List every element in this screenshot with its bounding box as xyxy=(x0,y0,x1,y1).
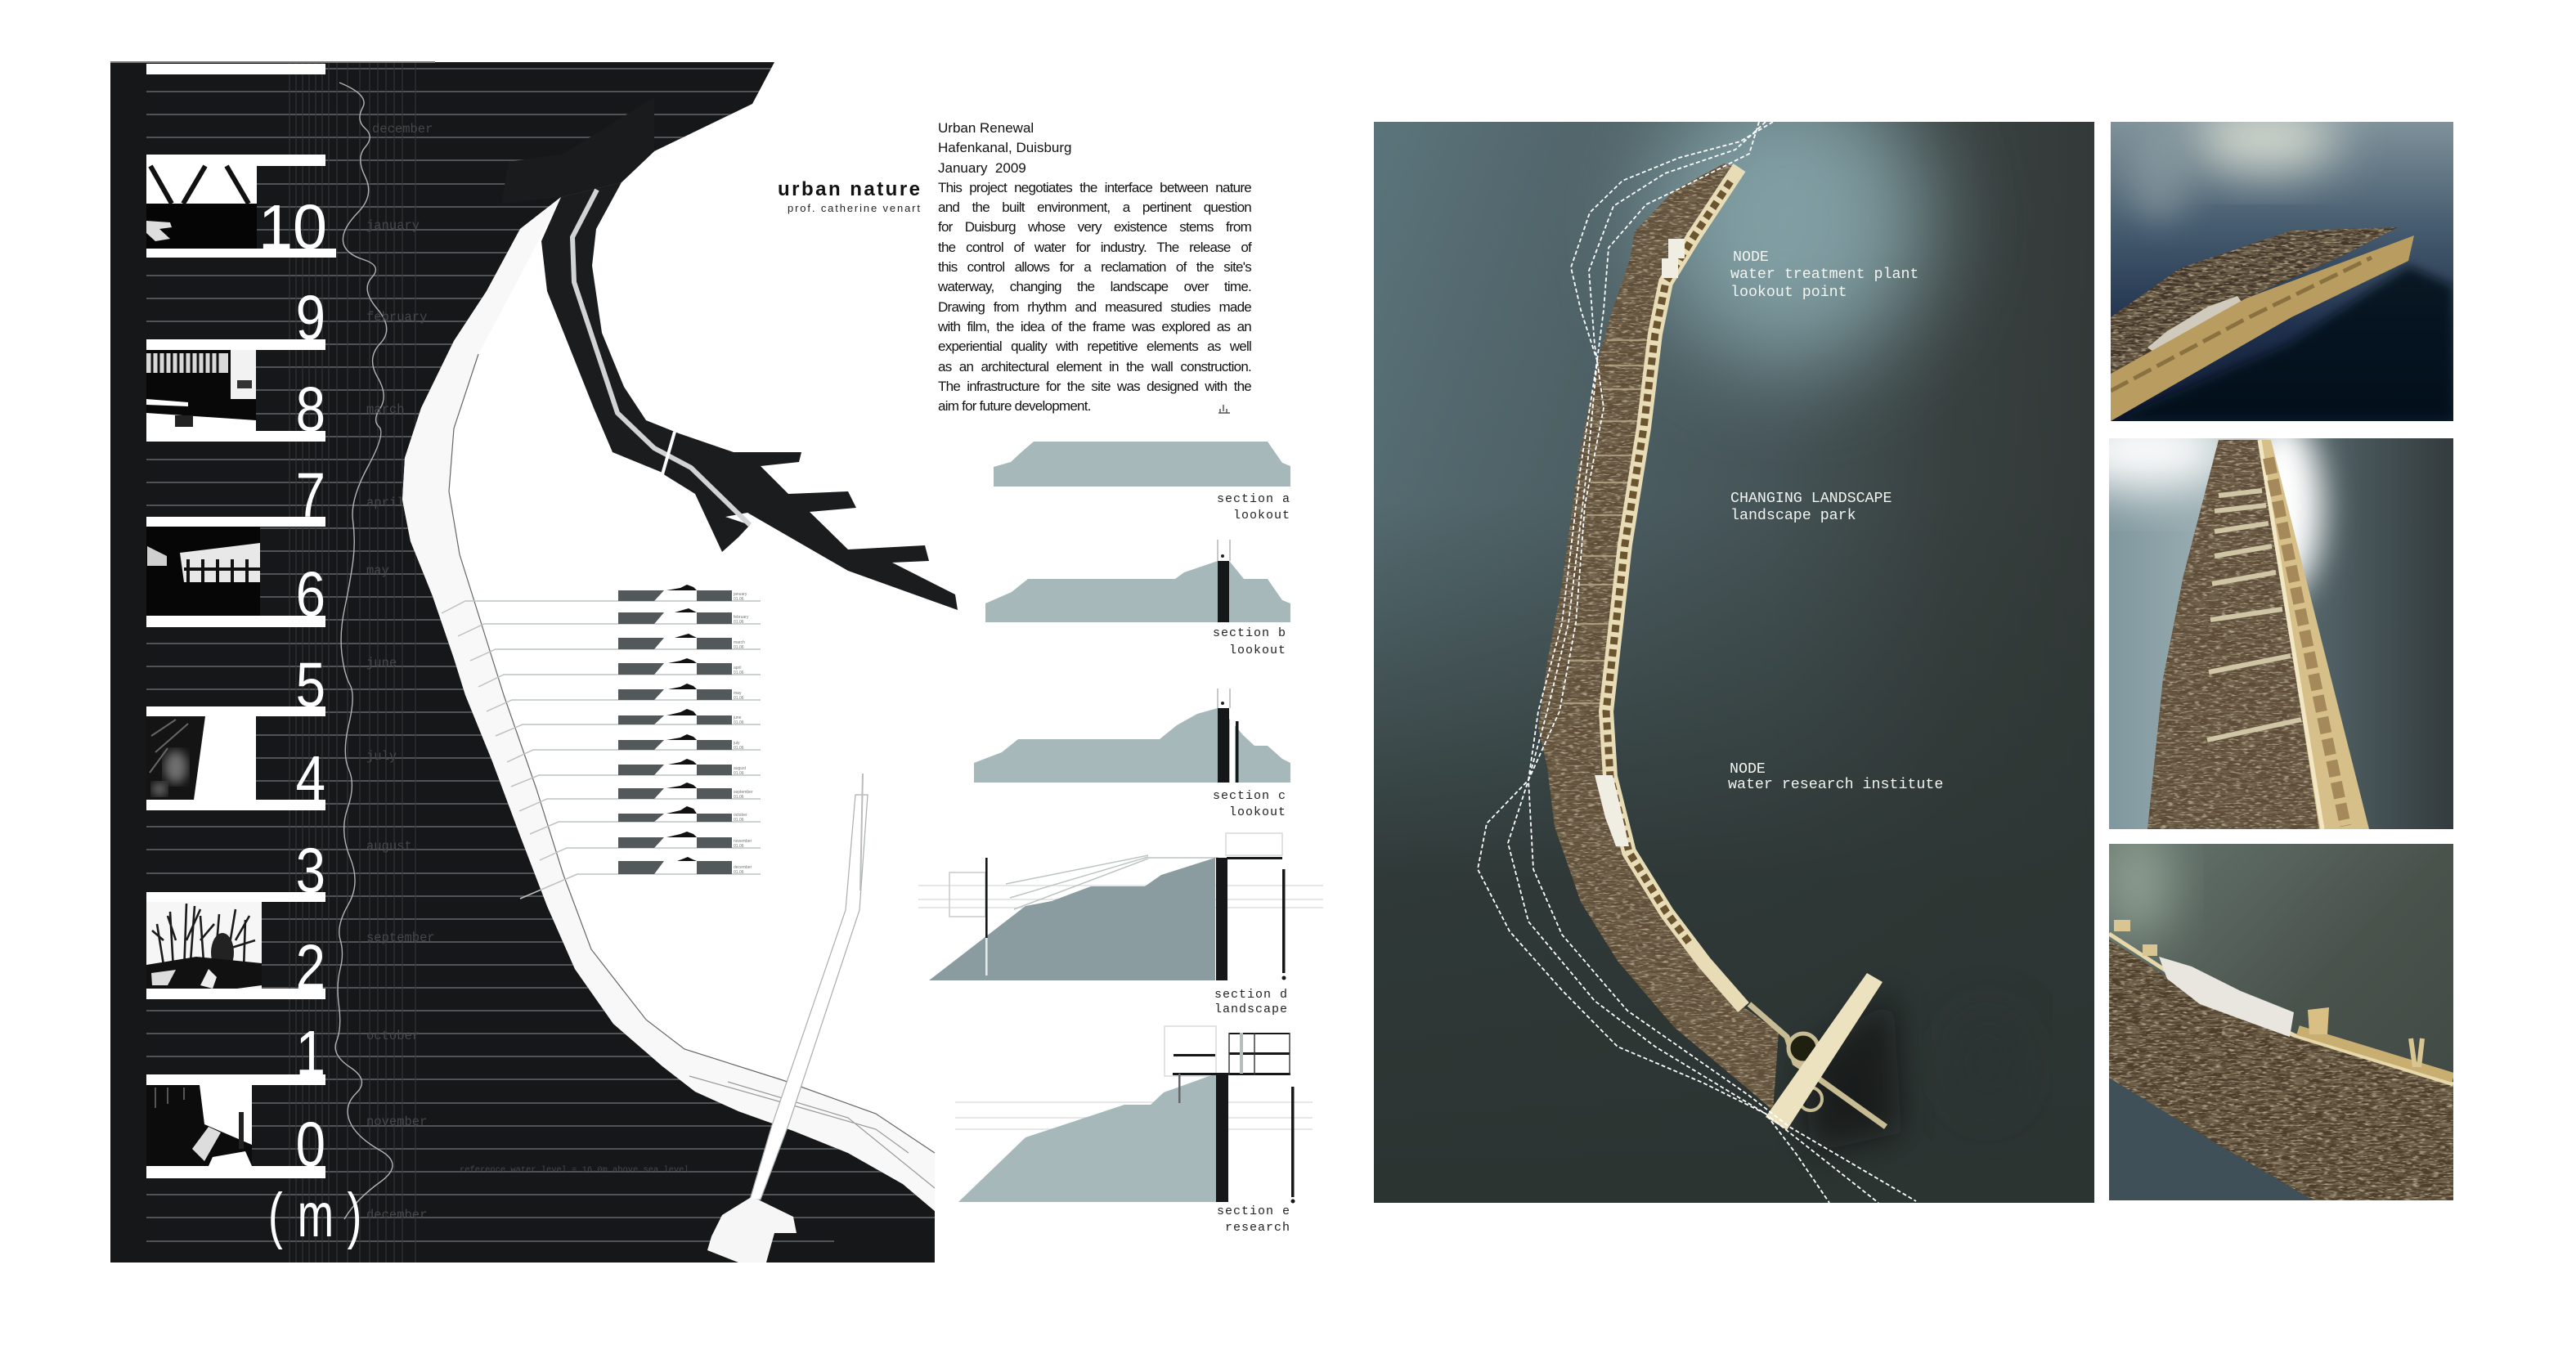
monthly section series: april xyxy=(734,666,741,671)
reference note: reference water level = 16.0m above sea level xyxy=(460,1165,689,1175)
section b: lookout xyxy=(1229,644,1286,657)
text block: project description: and the built environment, a pertinent question xyxy=(938,200,1251,215)
monthly section series: may xyxy=(734,691,742,696)
month labels: december xyxy=(366,1208,427,1222)
white scale bars xyxy=(146,64,336,1178)
month labels: july xyxy=(366,749,397,764)
scale numbers: 7 xyxy=(296,460,325,531)
film still 5: trees xyxy=(146,902,262,989)
section c: lookout xyxy=(1229,805,1286,819)
dark strip with harbour fingers xyxy=(501,97,958,610)
scale numbers xyxy=(258,192,327,1180)
photo annotations: NODE xyxy=(1730,761,1766,778)
section d: landscape xyxy=(1214,1002,1288,1016)
scale numbers: 9 xyxy=(296,283,325,353)
text block: project description: January 2009 xyxy=(938,160,1026,176)
month labels: november xyxy=(366,1115,427,1129)
month labels: january xyxy=(366,218,420,233)
unit label: (m) xyxy=(268,1181,361,1249)
month labels: march xyxy=(366,402,405,417)
text block: project description: for Duisburg whose very existence stems from xyxy=(938,219,1251,235)
photo annotations: lookout point xyxy=(1730,285,1847,301)
text block: project description: as an architectural element in the wall construction. xyxy=(938,359,1251,375)
section c xyxy=(974,688,1290,819)
photo annotations xyxy=(1728,249,1943,793)
photo annotations: NODE xyxy=(1733,249,1769,266)
leader lines xyxy=(442,601,761,899)
section a xyxy=(994,442,1290,523)
monthly section series xyxy=(442,585,761,899)
month labels: april xyxy=(366,496,405,510)
section d xyxy=(918,833,1323,1016)
river band plan xyxy=(402,197,935,1211)
section b: section b xyxy=(1213,626,1286,640)
text block: project description: the control of water for industry. The release of xyxy=(938,240,1251,255)
scale numbers: 5 xyxy=(296,650,325,720)
monthly section series: 01.06 xyxy=(734,818,744,823)
scale numbers: 6 xyxy=(296,559,325,630)
monthly section series: august xyxy=(734,766,747,771)
text block: project description: this control allows for a reclamation of the site's xyxy=(938,259,1251,275)
section e xyxy=(955,1026,1313,1235)
section e: section e xyxy=(1217,1204,1290,1218)
monthly section series: november xyxy=(734,839,752,844)
T-bar end structure xyxy=(1749,973,1886,1130)
section d: section d xyxy=(1214,988,1288,1002)
scale numbers: 0 xyxy=(296,1110,325,1180)
monthly section series: 01.06 xyxy=(734,771,744,776)
section b xyxy=(985,540,1290,657)
scale numbers: 8 xyxy=(296,375,325,445)
water level curve xyxy=(335,83,393,1219)
text block: project description: Urban Renewal xyxy=(938,120,1034,136)
monthly section series: october xyxy=(734,813,747,818)
month labels: december xyxy=(372,122,433,137)
section a: section a xyxy=(1217,492,1290,506)
scale numbers: 2 xyxy=(296,932,325,1002)
monthly section series: february xyxy=(734,615,749,620)
photo: top view along the wall xyxy=(2109,438,2453,829)
scale numbers: 1 xyxy=(296,1018,325,1088)
monthly section series: september xyxy=(734,790,753,795)
film still 3: night facade xyxy=(146,527,260,616)
photo: close-up of white node xyxy=(2106,826,2453,1200)
scale numbers: 3 xyxy=(296,836,325,906)
monthly section series: december xyxy=(734,865,752,870)
monthly section series: 01.06 xyxy=(734,620,744,625)
monthly section series: 01.06 xyxy=(734,870,744,875)
month labels: september xyxy=(366,931,435,945)
monthly section series: 01.06 xyxy=(734,597,744,602)
text block: project description: aim for future development. xyxy=(938,398,1091,414)
photo annotations: water research institute xyxy=(1728,777,1943,793)
text block: project description: with film, the idea of the frame was explored as an xyxy=(938,319,1251,334)
model shadow xyxy=(1803,993,1901,1153)
monthly section series: june xyxy=(733,715,742,720)
text block: project description: The infrastructure for the site was designed with the xyxy=(938,379,1251,394)
monthly section series: 01.06 xyxy=(734,645,744,650)
month labels xyxy=(366,122,435,1222)
month labels: august xyxy=(366,839,412,854)
month labels: february xyxy=(366,310,427,325)
monthly section series: 01.06 xyxy=(734,720,744,725)
photo annotations: water treatment plant xyxy=(1730,267,1919,283)
title: urban nature xyxy=(778,178,920,200)
bridge plan xyxy=(707,774,868,1263)
panel: black water-level chart xyxy=(110,61,935,1263)
text block: project description: This project negotiates the interface between nature xyxy=(938,180,1251,195)
title xyxy=(778,178,920,214)
month labels: october xyxy=(366,1029,420,1043)
photo: perspective of model from end xyxy=(2111,106,2453,421)
film still 2: building xyxy=(146,350,256,431)
section c: section c xyxy=(1213,789,1286,803)
text block: project description: experiential quality with repetitive elements as well xyxy=(938,339,1251,354)
terrace strips xyxy=(1564,340,1648,703)
scale numbers: 10 xyxy=(258,192,327,262)
section rows xyxy=(618,590,732,874)
monthly section series: july xyxy=(733,741,740,746)
photo annotations: landscape park xyxy=(1730,508,1856,524)
text block: project description: Hafenkanal, Duisburg xyxy=(938,140,1071,155)
month labels: june xyxy=(366,656,397,671)
monthly section series: march xyxy=(734,640,745,645)
monthly section series: 01.06 xyxy=(734,795,744,800)
text block: project description xyxy=(938,120,1252,414)
text block: project description: waterway, changing the landscape over time. xyxy=(938,279,1251,294)
cream retaining wall xyxy=(1606,168,1744,1007)
icon: small end mark xyxy=(1218,405,1230,413)
monthly section series: january xyxy=(733,592,747,597)
scale numbers: 4 xyxy=(296,743,325,814)
monthly section series: 01.06 xyxy=(734,746,744,751)
section e: research xyxy=(1225,1221,1290,1235)
monthly section series: 01.06 xyxy=(734,696,744,701)
section a: lookout xyxy=(1233,509,1290,523)
dashed water level lines xyxy=(1478,122,1916,1203)
photo annotations: CHANGING LANDSCAPE xyxy=(1730,491,1892,507)
white nodes xyxy=(1595,239,1685,846)
film still 1: bridge xyxy=(146,166,257,249)
film still 6: canal path xyxy=(146,1085,252,1166)
cardboard landscape xyxy=(1538,164,1779,1110)
main photo: model on slate xyxy=(1374,74,2094,1203)
credit: prof. catherine venart xyxy=(788,202,920,214)
film still 4: wall and foliage xyxy=(146,716,256,800)
monthly section series: 01.06 xyxy=(734,844,744,849)
monthly section series: 01.06 xyxy=(734,671,744,675)
month labels: may xyxy=(366,563,389,578)
text block: project description: Drawing from rhythm and measured studies made xyxy=(938,299,1251,315)
